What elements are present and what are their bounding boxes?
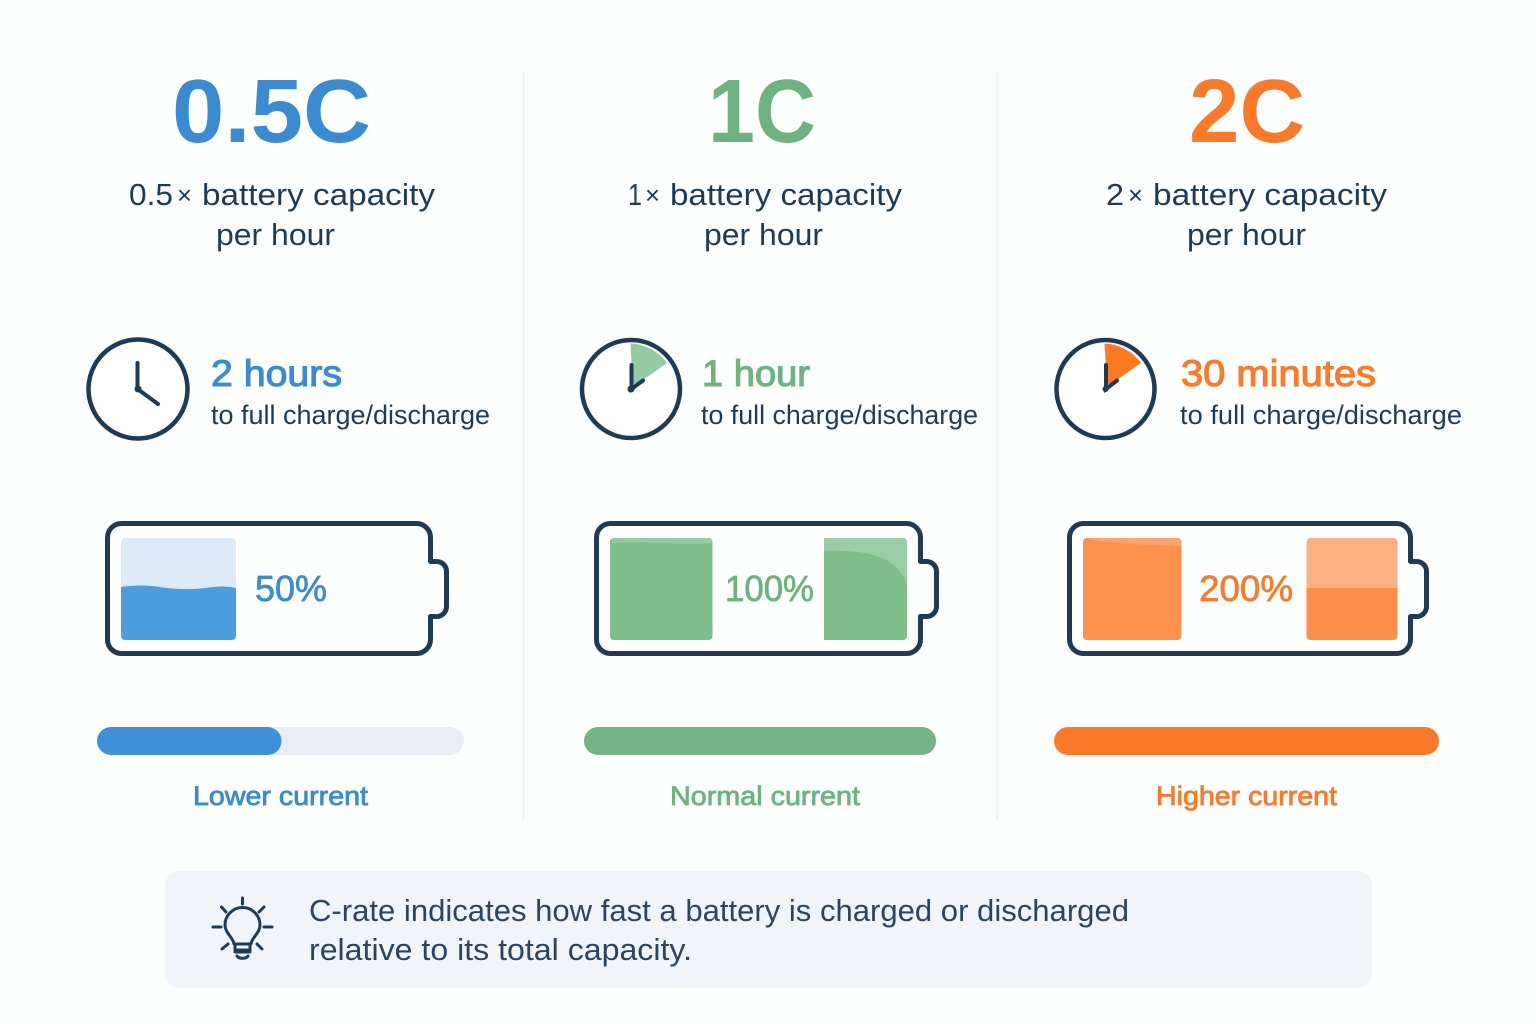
text: 0.5x battery capacity per hour	[129, 177, 436, 252]
text: 2x battery capacity per hour: battery capacity	[1153, 177, 1388, 212]
text: 2 hours to full charge: to full charge/discharge	[211, 400, 490, 430]
text: 1x battery capacity per hour: per hour	[704, 217, 823, 252]
text: 30 minutes to full charge: 30 minutes	[1181, 353, 1376, 394]
text: 0.5x battery capacity per hour: battery capacity	[202, 177, 436, 212]
progress bar: lower current	[97, 727, 464, 755]
text: 2 hours to full charge: 2 hours	[211, 353, 342, 394]
text: 0.5x battery capacity per hour: ×	[177, 180, 192, 210]
text: 2x battery capacity per hour	[1106, 177, 1388, 252]
battery: 100%	[596, 523, 936, 654]
progress bar: normal current	[584, 727, 936, 755]
label: lower current: Lower current	[193, 781, 369, 811]
progress bar: higher current	[1054, 727, 1439, 755]
text: 1x battery capacity per hour: battery capacity	[670, 177, 903, 212]
panel: 0.5C rate	[88, 62, 490, 811]
text: 2x battery capacity per hour: ×	[1128, 180, 1143, 210]
battery: 50%: 50%	[255, 568, 327, 609]
text: 1 hour to full charge	[701, 353, 978, 430]
panel: 2C rate	[1054, 62, 1462, 811]
battery: 200%	[1070, 523, 1426, 654]
icon: light bulb	[213, 898, 272, 958]
text: 1x battery capacity per hour	[628, 177, 903, 252]
callout: C-rate explanation	[165, 871, 1372, 988]
heading: 2C: 2C	[1189, 62, 1305, 162]
text: 1x battery capacity per hour: ×	[645, 180, 660, 210]
text: 2 hours to full charge	[211, 353, 490, 430]
text: 2x battery capacity per hour: 2	[1106, 177, 1124, 212]
text: 0.5x battery capacity per hour: per hour	[216, 217, 335, 252]
battery: 200%: 200%	[1199, 568, 1293, 609]
text: 1 hour to full charge: to full charge/discharge	[701, 400, 978, 430]
panel: 1C rate	[582, 62, 978, 811]
icon: clock showing 1 hour	[582, 340, 680, 438]
icon: clock showing 30 minutes	[1056, 340, 1154, 438]
text: C-rate note	[309, 893, 1129, 967]
text: C-rate note: C-rate indicates how fast a battery is charged or discharged	[309, 893, 1129, 928]
icon: clock showing 2 hours	[88, 340, 188, 438]
text: 30 minutes to full charge	[1180, 353, 1462, 430]
text: 30 minutes to full charge: to full charge/discharge	[1180, 400, 1462, 430]
text: 2x battery capacity per hour: per hour	[1187, 217, 1306, 252]
text: 1x battery capacity per hour: 1	[628, 177, 642, 212]
label: normal current: Normal current	[670, 781, 861, 811]
heading: 1C: 1C	[708, 62, 816, 162]
text: 1 hour to full charge: 1 hour	[702, 353, 810, 394]
battery: 100%: 100%	[725, 568, 814, 609]
heading: 0.5C: 0.5C	[172, 62, 371, 162]
text: 0.5x battery capacity per hour: 0.5	[129, 177, 173, 212]
text: C-rate note: relative to its total capacity.	[309, 932, 692, 967]
battery: 50%	[107, 523, 446, 654]
label: higher current: Higher current	[1156, 781, 1338, 811]
